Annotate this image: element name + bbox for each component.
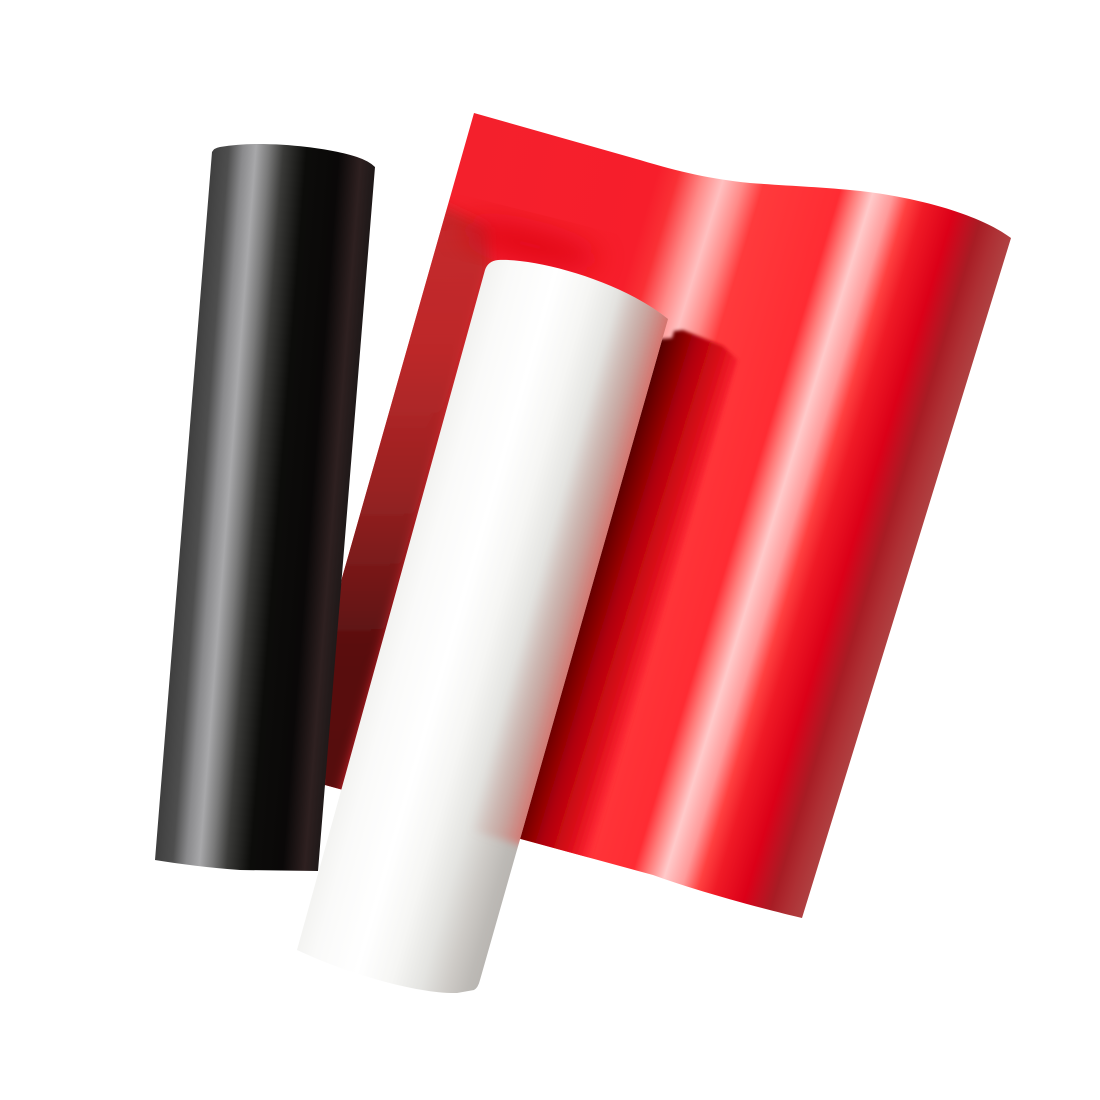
red sheet: soft shade above white roll xyxy=(463,213,597,275)
illustration: three vinyl rolls xyxy=(155,113,1011,993)
red sheet xyxy=(300,113,1011,918)
red sheet: cast shadow from white roll xyxy=(520,328,738,858)
black roll xyxy=(155,144,375,871)
white roll xyxy=(297,260,700,993)
red sheet: shaded left band xyxy=(325,204,494,790)
white roll: red reflection on right edge xyxy=(478,293,668,848)
